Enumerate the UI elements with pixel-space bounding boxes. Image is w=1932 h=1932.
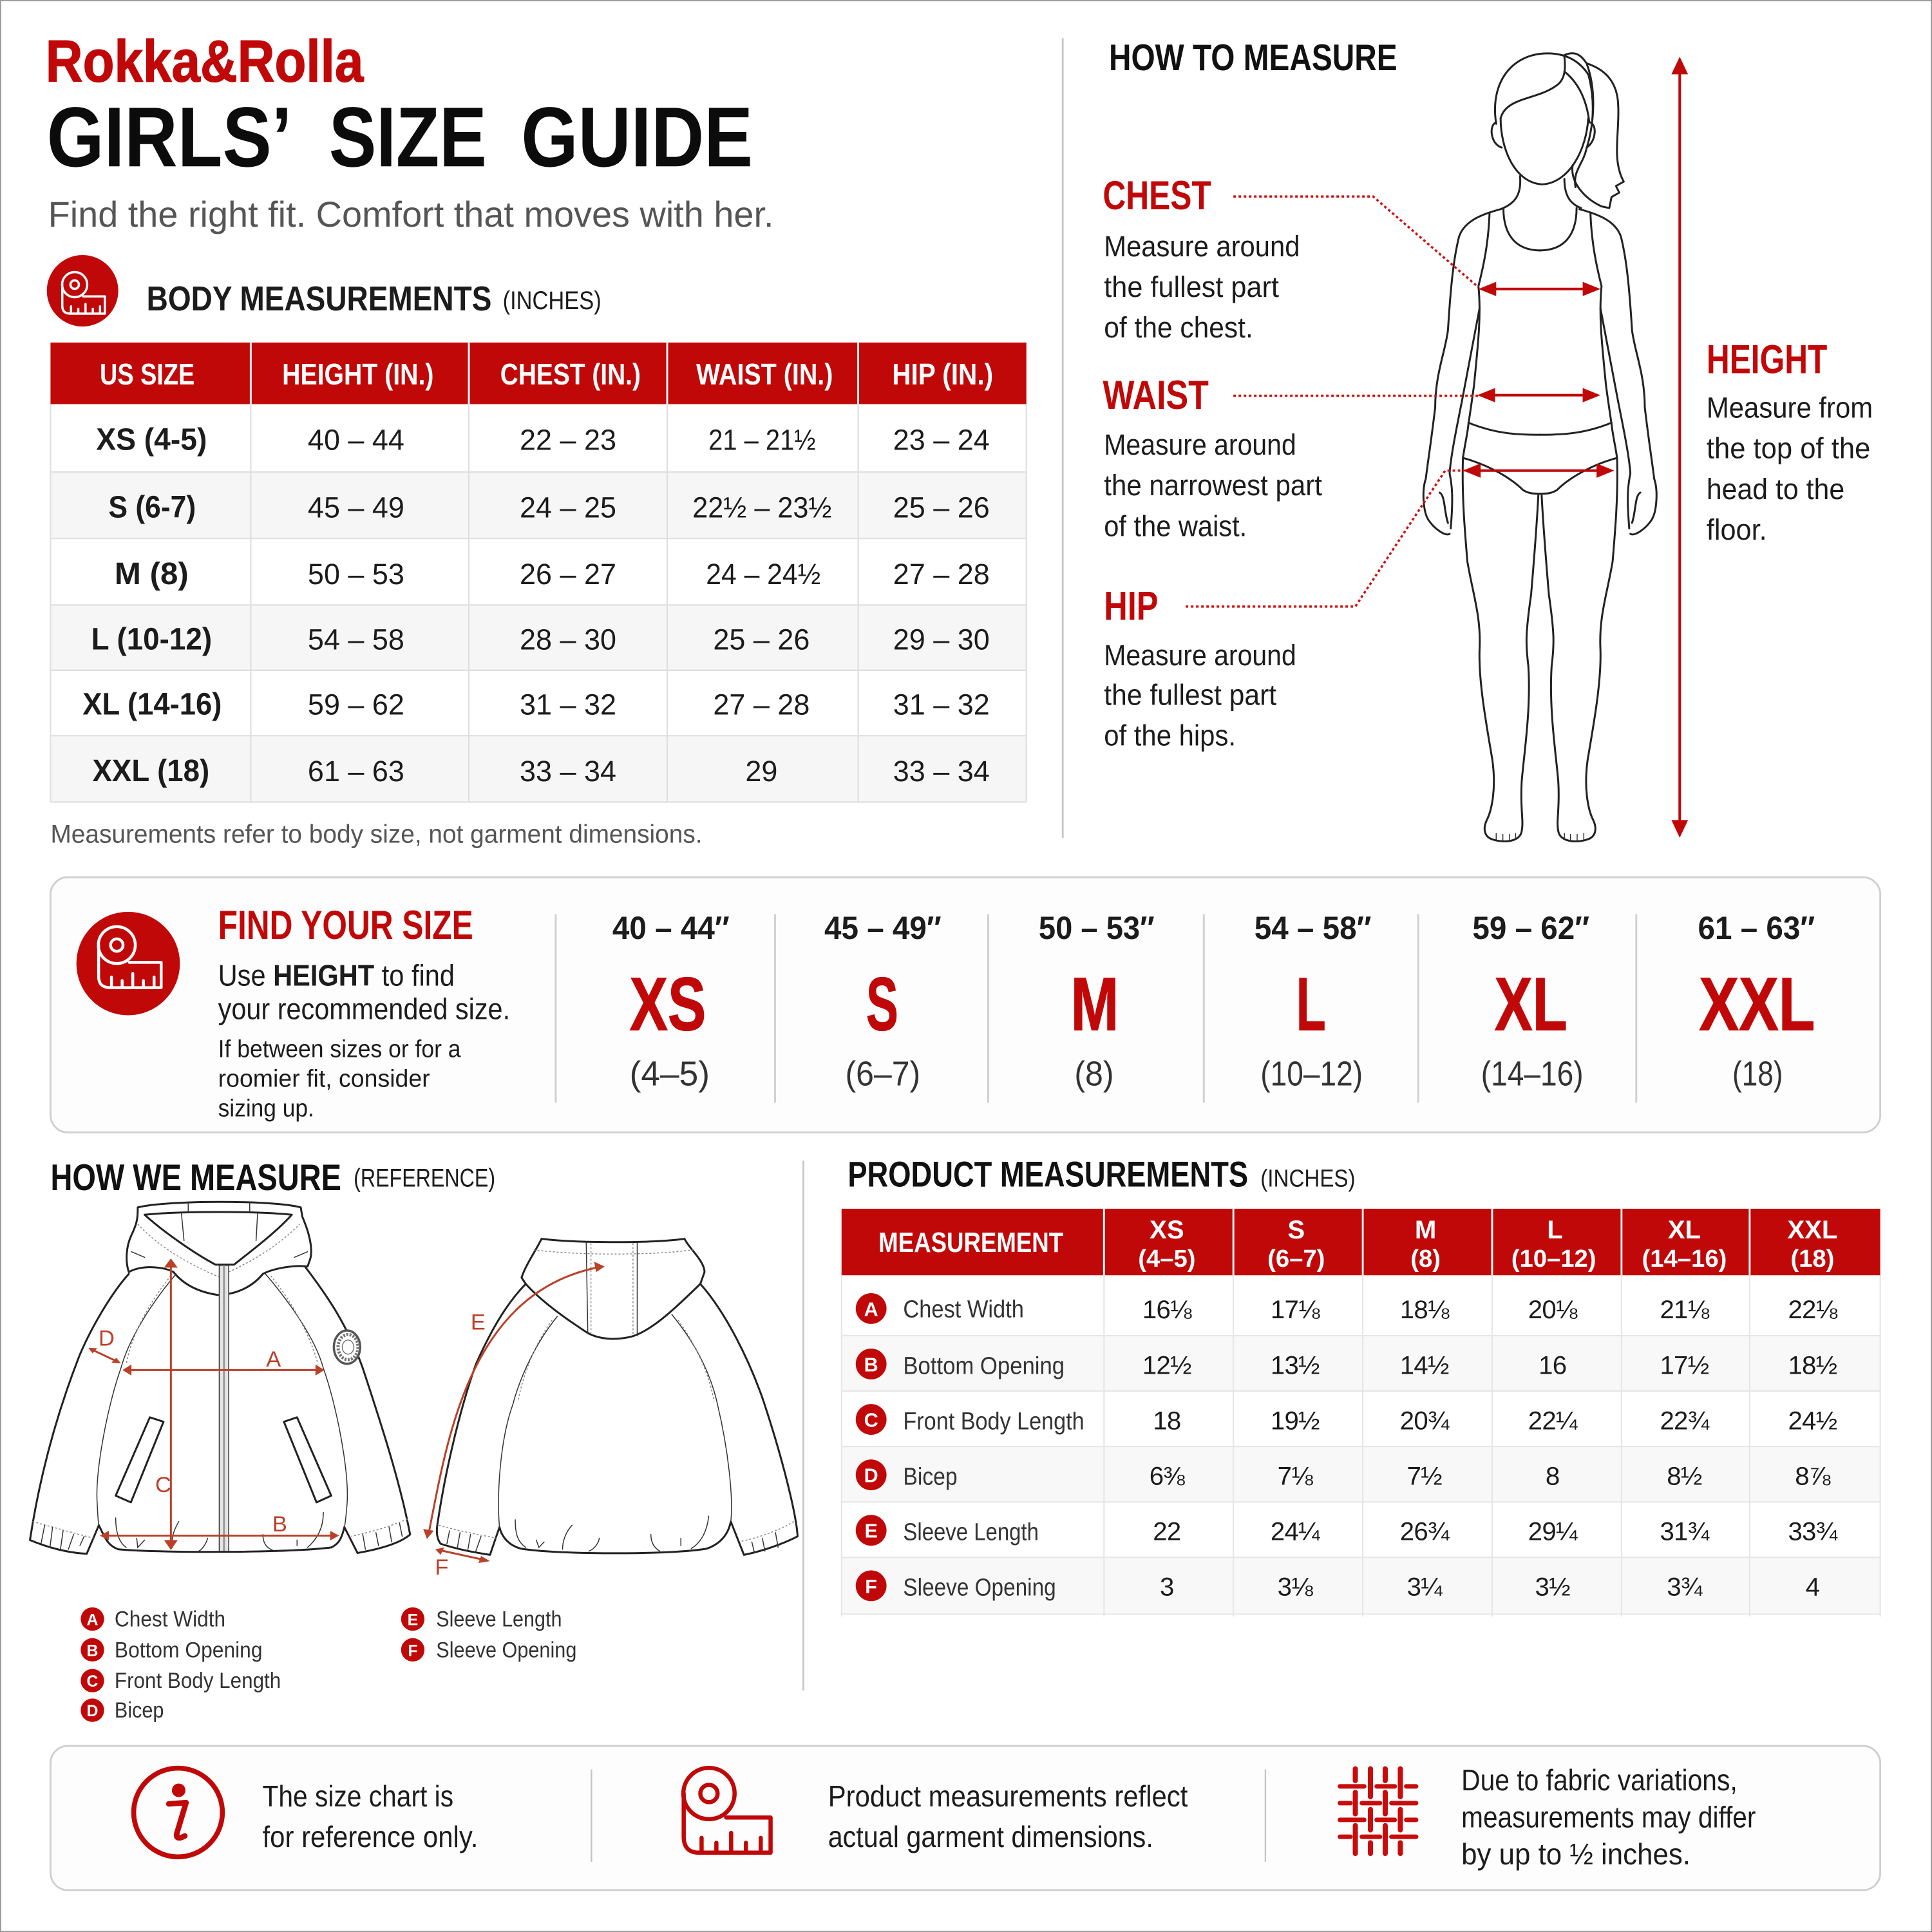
row C front body length (856, 1404, 1837, 1435)
note: fabric variation (1461, 1763, 1756, 1871)
find your size text: Use HEIGHT to find (218, 959, 455, 992)
row L: 28 – 30 (520, 623, 616, 656)
icon: fabric weave (1340, 1769, 1416, 1853)
hip arrow (1463, 464, 1615, 478)
size XS (612, 910, 730, 1094)
row F sleeve opening: 3¾ (1667, 1573, 1703, 1602)
waist instructions: Measure around (1104, 428, 1296, 461)
row F sleeve opening: 3½ (1535, 1573, 1570, 1602)
panel: how to measure (1103, 37, 1873, 841)
product table header (842, 1209, 1880, 1275)
icon: tape measure outline (683, 1768, 771, 1853)
legend A: A (87, 1611, 99, 1629)
note: reference only: The size chart is (263, 1779, 453, 1813)
legend E: Sleeve Length (436, 1607, 562, 1632)
heading: product measurements: PRODUCT MEASUREMENTS (848, 1154, 1248, 1194)
row C front body length: 18 (1153, 1406, 1180, 1435)
row E sleeve length: 26¾ (1400, 1517, 1450, 1546)
row E sleeve length: E (864, 1520, 878, 1542)
jacket measure letters: F (435, 1555, 448, 1580)
product table header: XS (1150, 1215, 1184, 1244)
waist leader (1233, 395, 1479, 397)
chest arrow (1479, 282, 1600, 296)
product table header: (6–7) (1267, 1245, 1325, 1273)
find your size text: sizing up. (218, 1094, 314, 1122)
row S: S (6-7) (108, 491, 196, 525)
row L: 25 – 26 (713, 623, 810, 656)
row B bottom opening: B (864, 1354, 878, 1376)
title: GUIDE (521, 89, 753, 184)
legend F: Sleeve Opening (436, 1638, 576, 1662)
product table header: S (1287, 1215, 1305, 1244)
row XXL: XXL (18) (92, 754, 209, 788)
hip instructions: of the hips. (1104, 719, 1236, 752)
note: fabric variation: by up to ½ inches. (1461, 1837, 1690, 1871)
right half of the body (1539, 208, 1656, 841)
waist instructions: the narrowest part (1104, 469, 1322, 502)
jacket measure letters (99, 1310, 486, 1580)
table header row: HEIGHT (IN.) (282, 357, 433, 391)
find your size text: If between sizes or for a (218, 1036, 461, 1063)
row D bicep: 7⅛ (1278, 1461, 1313, 1490)
arrow D bicep (88, 1348, 121, 1363)
illustration: girl figure outline (1423, 53, 1656, 841)
size M: M (1071, 961, 1119, 1046)
legend C: C (87, 1672, 99, 1690)
row C front body length: Front Body Length (903, 1407, 1084, 1435)
title: GIRLS’ (47, 89, 292, 184)
row C front body length: C (864, 1410, 878, 1432)
product table header: (4–5) (1138, 1245, 1196, 1273)
table note: Measurements refer to body size, not garment dimensions. (50, 820, 703, 849)
illustration: jacket back (423, 1239, 797, 1563)
row E sleeve length (856, 1515, 1838, 1546)
chest instructions: CHEST (1103, 173, 1211, 218)
row XXL: 61 – 63 (308, 755, 404, 788)
legend B: B (87, 1642, 98, 1660)
chest instructions: of the chest. (1104, 311, 1253, 344)
size XL: (14–16) (1481, 1056, 1584, 1094)
size M: (8) (1074, 1056, 1114, 1094)
table header row: CHEST (IN.) (500, 357, 641, 391)
legend D: Bicep (115, 1698, 164, 1723)
row L: 29 – 30 (893, 623, 990, 656)
row XL: 31 – 32 (520, 688, 616, 721)
jacket measure letters: A (266, 1347, 281, 1372)
height instructions: floor. (1707, 513, 1767, 546)
row M: M (8) (115, 557, 189, 591)
row E sleeve length: 29¼ (1528, 1517, 1578, 1546)
left half of the body (1423, 208, 1540, 841)
waist instructions: WAIST (1103, 373, 1209, 418)
size XXL: 61 – 63″ (1698, 910, 1815, 946)
height instructions: Measure from (1707, 392, 1873, 424)
find your size text: FIND YOUR SIZE (218, 903, 473, 948)
table header row (50, 343, 1027, 404)
note: garment dimensions (828, 1779, 1188, 1853)
waist instructions (1103, 373, 1322, 542)
row E sleeve length: 24¼ (1271, 1517, 1320, 1546)
row C front body length: 22¾ (1660, 1406, 1710, 1435)
row D bicep: D (864, 1465, 878, 1487)
row B bottom opening: Bottom Opening (903, 1352, 1065, 1379)
arrow A chest width (122, 1365, 325, 1376)
row A chest width: 22⅛ (1788, 1295, 1838, 1324)
size XL: XL (1495, 961, 1567, 1046)
size XS: (4–5) (630, 1056, 710, 1094)
product table header: M (1415, 1215, 1436, 1244)
legend B: Bottom Opening (115, 1638, 263, 1662)
hip instructions: HIP (1104, 583, 1158, 629)
row C front body length: 22¼ (1528, 1406, 1578, 1435)
row D bicep: 8½ (1667, 1461, 1702, 1490)
height instructions: the top of the (1707, 432, 1870, 465)
row E sleeve length: 31¾ (1660, 1517, 1710, 1546)
row XL: 27 – 28 (713, 688, 810, 721)
find your size text: roomier fit, consider (218, 1065, 430, 1092)
panel: footer notes (50, 1746, 1880, 1890)
illustration: jacket front (30, 1202, 410, 1554)
row C front body length: 24½ (1788, 1406, 1837, 1435)
row C front body length: 20¾ (1400, 1406, 1450, 1435)
row B bottom opening: 13½ (1271, 1350, 1320, 1379)
table header row: US SIZE (100, 357, 194, 391)
row A chest width: A (864, 1298, 878, 1320)
product table header: L (1547, 1215, 1563, 1244)
size XS: 40 – 44″ (612, 910, 730, 946)
row XXL: 33 – 34 (893, 755, 990, 788)
arrow F sleeve opening (435, 1548, 490, 1563)
row E sleeve length: Sleeve Length (903, 1519, 1039, 1546)
size XL (1472, 910, 1589, 1094)
row XS: 21 – 21½ (708, 423, 816, 456)
row D bicep: 8 (1546, 1461, 1560, 1490)
heading: how to measure: HOW TO MEASURE (1109, 37, 1397, 79)
product table header: (8) (1410, 1245, 1441, 1273)
legend C: Front Body Length (115, 1669, 281, 1693)
note: garment dimensions: Product measurements reflect (828, 1779, 1188, 1813)
title (47, 89, 753, 184)
row A chest width: 17⅛ (1271, 1295, 1320, 1324)
note: fabric variation: measurements may differ (1461, 1800, 1756, 1833)
row F sleeve opening: Sleeve Opening (903, 1574, 1056, 1602)
row E sleeve length: 22 (1153, 1517, 1180, 1546)
product table header: XL (1668, 1215, 1701, 1244)
jacket measure letters: E (471, 1310, 486, 1334)
row B bottom opening: 16 (1539, 1350, 1566, 1379)
jacket measure letters: B (272, 1512, 287, 1537)
row D bicep: Bicep (903, 1463, 958, 1490)
row L: L (10-12) (91, 622, 212, 656)
row M: 27 – 28 (893, 558, 990, 591)
heading: body measurements: (INCHES) (503, 286, 601, 315)
row B bottom opening: 14½ (1400, 1350, 1449, 1379)
row E sleeve length: 33¾ (1788, 1517, 1838, 1546)
note: reference only (263, 1779, 478, 1853)
row F sleeve opening: 3 (1160, 1573, 1174, 1602)
note: reference only: for reference only. (263, 1820, 478, 1853)
table header row: WAIST (IN.) (696, 357, 833, 391)
measurement arrows on figure (1186, 57, 1688, 838)
find your size text: your recommended size. (218, 992, 510, 1025)
sleeve badge (334, 1331, 360, 1364)
size L: 54 – 58″ (1255, 910, 1371, 946)
arrow C front body length (164, 1258, 178, 1550)
row S (108, 491, 990, 525)
row A chest width: 20⅛ (1528, 1295, 1578, 1324)
chest leader (1233, 196, 1479, 287)
title: SIZE (329, 89, 487, 184)
row B bottom opening: 12½ (1142, 1350, 1191, 1379)
hip leader (1186, 471, 1464, 607)
height instructions: head to the (1707, 473, 1844, 506)
size XS: XS (630, 961, 706, 1046)
heading: how we measure: HOW WE MEASURE (50, 1157, 341, 1198)
icon: tape measure badge small (47, 255, 118, 327)
size XXL: XXL (1699, 961, 1815, 1046)
chest instructions: Measure around (1104, 230, 1300, 263)
arrow E sleeve length (423, 1262, 605, 1539)
row B bottom opening: 18½ (1788, 1350, 1837, 1379)
row XL (82, 688, 990, 722)
row A chest width: 21⅛ (1660, 1295, 1710, 1324)
panel: find your size (50, 877, 1880, 1132)
size M: 50 – 53″ (1039, 910, 1155, 946)
row D bicep (856, 1459, 1831, 1490)
row L: 54 – 58 (308, 623, 404, 656)
chest instructions: the fullest part (1104, 270, 1279, 303)
size M (1039, 910, 1155, 1094)
row A chest width: Chest Width (903, 1295, 1024, 1323)
row XS: 23 – 24 (893, 423, 990, 456)
row M (115, 557, 990, 591)
legend D (80, 1698, 164, 1723)
note: fabric variation: Due to fabric variations, (1461, 1763, 1738, 1797)
row XS (96, 422, 990, 457)
size L (1255, 910, 1371, 1094)
row D bicep: 6⅜ (1150, 1461, 1185, 1490)
row F sleeve opening: 3¼ (1407, 1573, 1443, 1602)
row S: 22½ – 23½ (692, 491, 831, 524)
row A chest width: 16⅛ (1142, 1295, 1192, 1324)
note: garment dimensions: actual garment dimensions. (828, 1820, 1153, 1853)
row B bottom opening: 17½ (1660, 1350, 1709, 1379)
row S: 45 – 49 (308, 491, 404, 524)
row D bicep: 8⅞ (1795, 1461, 1831, 1490)
size XL: 59 – 62″ (1472, 910, 1589, 946)
waist arrow (1477, 388, 1600, 402)
row F sleeve opening: F (865, 1576, 877, 1598)
row A chest width (856, 1293, 1838, 1324)
row XXL: 33 – 34 (520, 755, 616, 788)
brand name: Rokka&Rolla (46, 28, 364, 94)
size S: (6–7) (845, 1056, 920, 1094)
jacket measure letters: D (99, 1326, 115, 1350)
icon: tape measure badge large (77, 912, 180, 1016)
tagline: Find the right fit. Comfort that moves with her. (48, 194, 774, 234)
table: product measurements (842, 1209, 1880, 1616)
height instructions: HEIGHT (1707, 337, 1827, 383)
legend: jacket measurements (80, 1607, 576, 1723)
row A chest width: 18⅛ (1400, 1295, 1450, 1324)
row D bicep: 7½ (1407, 1461, 1442, 1490)
size XXL: (18) (1732, 1056, 1783, 1094)
row XS: 40 – 44 (308, 423, 404, 456)
row XL: 59 – 62 (308, 688, 404, 721)
size S: 45 – 49″ (824, 910, 942, 946)
row F sleeve opening (856, 1570, 1820, 1602)
height arrow (1671, 57, 1688, 838)
row XXL: 29 (745, 755, 777, 788)
height instructions (1707, 337, 1873, 546)
legend A: Chest Width (115, 1607, 225, 1632)
heading: how we measure: (REFERENCE) (354, 1163, 495, 1192)
product table header: (10–12) (1511, 1245, 1596, 1273)
row B bottom opening (856, 1349, 1837, 1379)
size S (824, 910, 942, 1094)
chest instructions (1103, 173, 1300, 344)
legend F: F (408, 1642, 418, 1660)
product table header: MEASUREMENT (878, 1227, 1063, 1258)
row XS: XS (4-5) (96, 422, 207, 457)
row XL: XL (14-16) (82, 688, 222, 722)
row XS: 22 – 23 (520, 423, 616, 456)
hip instructions: the fullest part (1104, 678, 1277, 711)
size S: S (866, 961, 898, 1046)
table header row: HIP (IN.) (892, 357, 993, 391)
size L: L (1296, 961, 1326, 1046)
size L: (10–12) (1260, 1056, 1363, 1094)
row M: 24 – 24½ (706, 558, 820, 591)
legend E: E (408, 1611, 418, 1629)
hip instructions: Measure around (1104, 639, 1296, 672)
row XL: 31 – 32 (893, 688, 990, 721)
row S: 25 – 26 (893, 491, 990, 524)
row M: 50 – 53 (308, 558, 404, 591)
row XXL (92, 754, 990, 788)
product table header: (14–16) (1642, 1245, 1727, 1273)
row L (91, 622, 990, 656)
product table header: XXL (1787, 1215, 1837, 1244)
legend D: D (87, 1702, 98, 1720)
size XXL (1698, 910, 1815, 1094)
jacket measure letters: C (155, 1473, 171, 1497)
row M: 26 – 27 (520, 558, 616, 591)
row F sleeve opening: 4 (1806, 1573, 1820, 1602)
icon: info (134, 1768, 222, 1857)
row F sleeve opening: 3⅛ (1278, 1573, 1313, 1602)
row C front body length: 19½ (1271, 1406, 1320, 1435)
row S: 24 – 25 (520, 491, 616, 524)
arrow B bottom opening (100, 1531, 339, 1540)
hip instructions (1104, 583, 1296, 752)
find your size text (218, 903, 510, 1122)
waist instructions: of the waist. (1104, 509, 1247, 542)
header: brand and title (46, 28, 774, 234)
heading: body measurements: BODY MEASUREMENTS (147, 280, 491, 318)
heading: product measurements: (INCHES) (1260, 1164, 1356, 1192)
zipper (219, 1265, 229, 1552)
table: body measurements (50, 343, 1027, 802)
product table header: (18) (1790, 1245, 1834, 1273)
